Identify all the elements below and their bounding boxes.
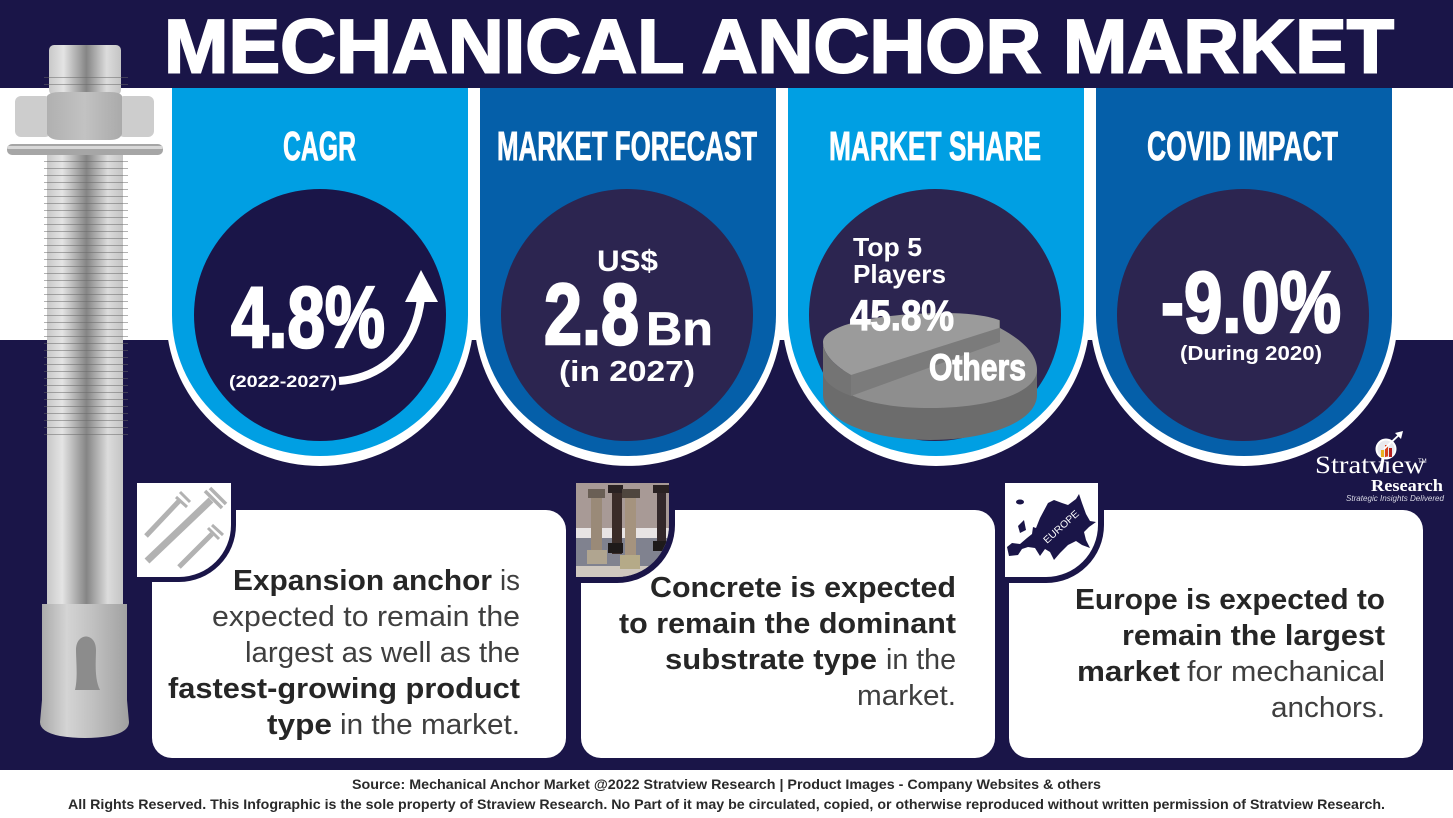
panel: expansion anchor card — [130, 478, 566, 758]
text block: europe — [1075, 584, 1385, 724]
text block: concrete: Concrete is expected — [650, 572, 956, 604]
text block: concrete: market. — [857, 680, 956, 712]
footer: All Rights Reserved. This Infographic is the sole property of Straview Research. No Part of it may be circulated, copied, or otherwise reproduced without written permission of Stratview Research. — [68, 796, 1385, 812]
logo: Stratview Research: Strategic Insights Delivered — [1346, 494, 1445, 503]
logo: Stratview Research: Research — [1371, 476, 1444, 495]
year label: (in 2027) — [559, 356, 695, 388]
panel: europe card — [998, 478, 1423, 758]
panel: market share — [782, 88, 1090, 466]
heading: market share: MARKET SHARE — [829, 123, 1041, 169]
text block: europe: market — [1077, 656, 1180, 688]
value: 45.8%: 45.8% — [850, 292, 954, 340]
period label: (During 2020) — [1180, 343, 1322, 365]
logo: Stratview Research — [1315, 431, 1445, 503]
logo: Stratview Research: Stratview — [1315, 452, 1425, 479]
panel: concrete card — [570, 478, 995, 758]
text block: expansion anchor: in the market. — [340, 709, 520, 741]
footer: Source: Mechanical Anchor Market @2022 Stratview Research | Product Images - Company Websites & others — [352, 776, 1101, 792]
text block: concrete — [619, 572, 956, 712]
text block: europe: remain the largest — [1122, 620, 1385, 652]
icon: anchor bolts — [137, 483, 231, 577]
heading: covid impact: COVID IMPACT — [1147, 123, 1338, 169]
text block: concrete: substrate type — [665, 644, 877, 676]
text block: europe: anchors. — [1271, 692, 1385, 724]
label: top 5 players — [853, 232, 946, 289]
heading: CAGR: CAGR — [283, 123, 356, 169]
currency label: US$ — [597, 245, 658, 278]
icon: europe map — [1005, 483, 1098, 577]
text block: concrete: in the — [886, 644, 956, 676]
value: -9.0%: -9.0% — [1161, 255, 1341, 351]
panel: covid impact — [1090, 88, 1398, 466]
title: MECHANICAL ANCHOR MARKET — [164, 4, 1394, 90]
text block: expansion anchor: type — [267, 709, 332, 741]
text block: europe: for mechanical — [1187, 656, 1385, 688]
icon: growth arrow — [339, 270, 438, 381]
text block: expansion anchor: fastest-growing product — [168, 673, 520, 705]
text block: expansion anchor: expected to remain the — [212, 601, 520, 633]
logo: Stratview Research: TM — [1418, 459, 1427, 465]
panel: CAGR — [166, 88, 474, 466]
value: 2.8: 2.8 — [544, 267, 639, 363]
text block: expansion anchor: Expansion anchor — [233, 565, 492, 597]
value: 4.8%: 4.8% — [231, 270, 385, 366]
label: top 5 players: Top 5 — [853, 232, 922, 262]
icon: magnifier with chart — [1376, 431, 1403, 472]
text block: expansion anchor: largest as well as the — [245, 637, 520, 669]
text block: europe: Europe is expected to — [1075, 584, 1385, 616]
heading: market forecast: MARKET FORECAST — [497, 123, 757, 169]
icon: europe map: EUROPE — [1042, 508, 1082, 546]
footer — [68, 776, 1385, 812]
panel: market forecast — [474, 88, 782, 466]
text block: concrete: to remain the dominant — [619, 608, 956, 640]
chart: 3D pie — [823, 313, 1037, 440]
text block: expansion anchor — [168, 565, 520, 741]
icon: concrete bolts photo — [576, 483, 669, 577]
illustration: anchor bolt — [7, 45, 163, 738]
label: others: Others — [929, 347, 1026, 388]
unit: Bn: Bn — [646, 302, 713, 355]
label: top 5 players: Players — [853, 259, 946, 289]
text block: expansion anchor: is — [500, 565, 520, 597]
period label: (2022-2027) — [229, 372, 337, 391]
